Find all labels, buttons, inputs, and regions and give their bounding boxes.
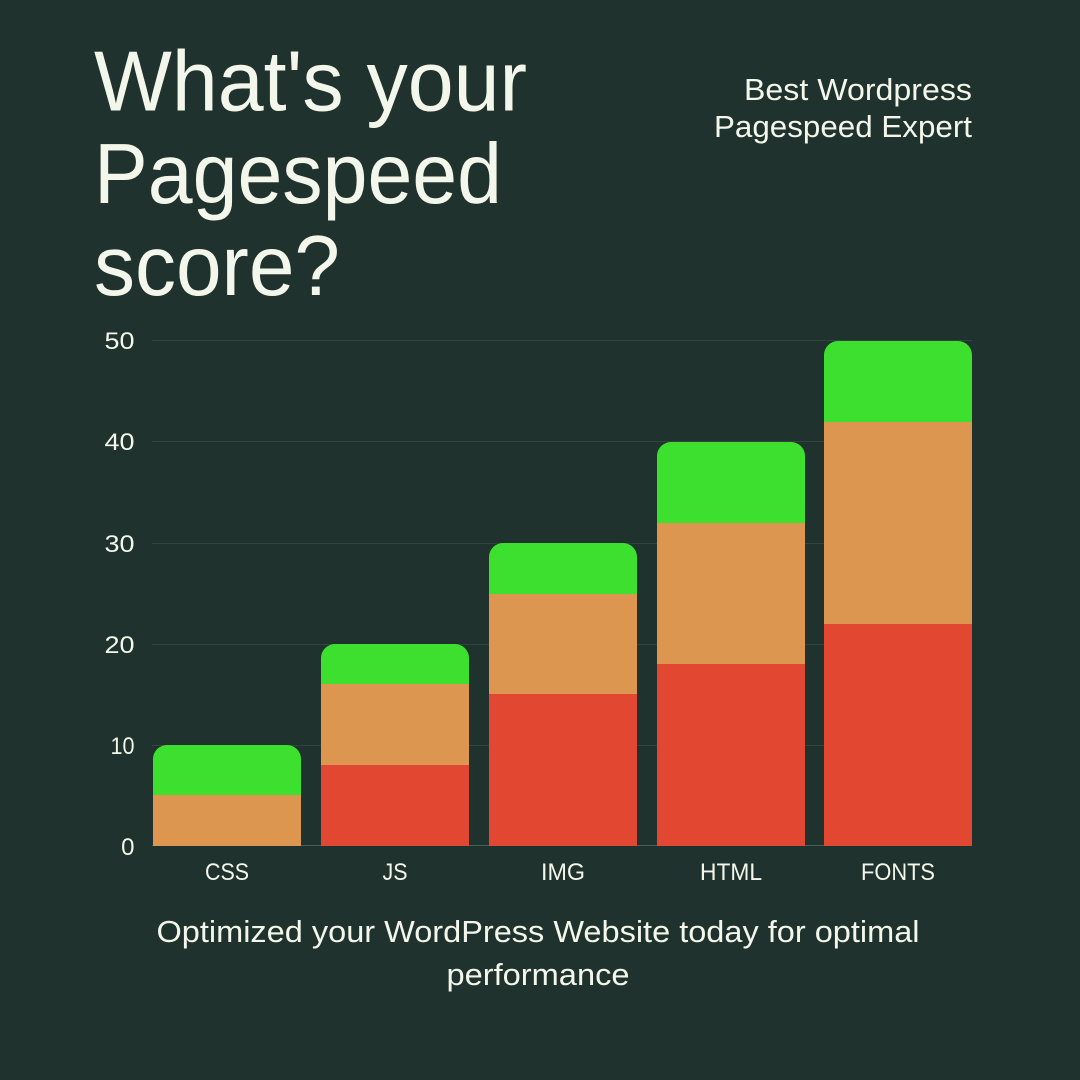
title bbox=[94, 34, 527, 314]
y axis labels: 0 bbox=[121, 834, 134, 861]
y axis labels: 20 bbox=[104, 632, 134, 659]
bar: FONTS bbox=[824, 341, 972, 846]
x axis labels: IMG bbox=[541, 859, 585, 886]
x axis labels bbox=[205, 859, 935, 886]
bar: HTML bbox=[657, 442, 805, 846]
grid lines bbox=[152, 340, 972, 846]
subtitle bbox=[714, 72, 972, 144]
footer text: Optimized your WordPress Website today for optimal bbox=[156, 914, 920, 949]
subtitle: Pagespeed Expert bbox=[714, 109, 972, 144]
y axis labels: 30 bbox=[104, 531, 134, 558]
footer text: performance bbox=[446, 957, 630, 992]
title: score? bbox=[94, 219, 340, 314]
stacked bar chart bbox=[104, 328, 972, 886]
subtitle: Best Wordpress bbox=[744, 72, 972, 107]
x axis labels: JS bbox=[382, 859, 408, 886]
x axis labels: CSS bbox=[205, 859, 249, 886]
title: Pagespeed bbox=[94, 127, 502, 222]
y axis labels bbox=[104, 328, 134, 861]
bar: CSS bbox=[153, 745, 301, 846]
footer text bbox=[156, 914, 920, 992]
bar: IMG bbox=[489, 543, 637, 846]
x axis labels: HTML bbox=[700, 859, 762, 886]
title: What's your bbox=[94, 34, 527, 130]
y axis labels: 10 bbox=[110, 733, 134, 760]
y axis labels: 50 bbox=[104, 328, 134, 355]
y axis labels: 40 bbox=[104, 429, 134, 456]
x axis labels: FONTS bbox=[861, 859, 935, 886]
bar: JS bbox=[321, 644, 469, 846]
